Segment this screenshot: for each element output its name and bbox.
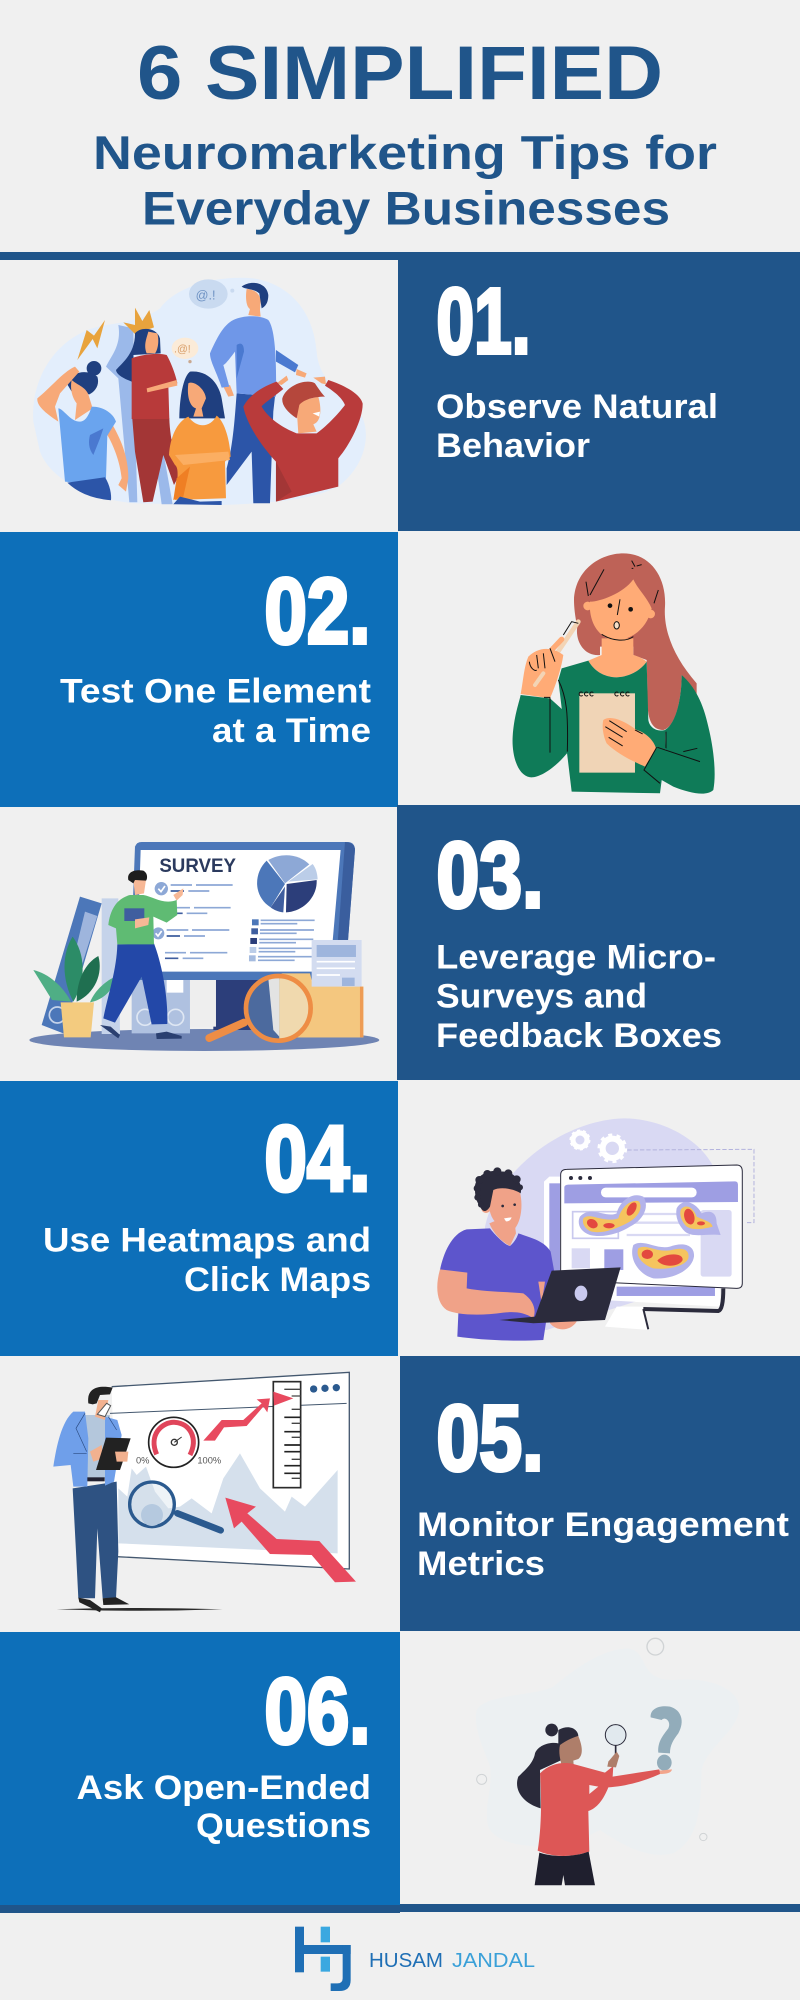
panel: tip 06: Questions	[196, 1807, 371, 1845]
illustration: frustrated group of people	[33, 278, 366, 505]
illustration: woman with magnifier and question mark	[476, 1638, 739, 1885]
panel: tip 04: Click Maps	[184, 1261, 371, 1299]
panel: tip 01: 01.	[436, 269, 530, 373]
logo: Husam Jandal: HUSAM	[369, 1950, 443, 1972]
panel: tip 05: Metrics	[417, 1545, 545, 1583]
panel: tip 01: Observe Natural	[436, 388, 718, 426]
icon: HJ monogram	[295, 1927, 351, 1991]
panel: tip 05: 05.	[436, 1386, 544, 1490]
panel: tip 03: Leverage Micro-	[436, 939, 716, 977]
panel: tip 05: Monitor Engagement	[417, 1506, 789, 1544]
panel: tip 06	[0, 1632, 400, 1905]
illustration: survey on monitor: SURVEY	[159, 856, 236, 877]
title: 6 SIMPLIFIED	[137, 31, 663, 116]
panel: tip 03	[397, 805, 800, 1080]
title: Neuromarketing Tips for	[93, 126, 717, 179]
illustration: man reviewing engagement dashboard: 100%	[197, 1455, 221, 1465]
panel: tip 02	[0, 532, 398, 807]
panel: tip 02: 02.	[264, 559, 370, 663]
panel: tip 05	[400, 1356, 800, 1631]
logo: Husam Jandal	[295, 1927, 535, 1991]
illustration: frustrated group of people: @.!	[196, 288, 216, 302]
panel: tip 03: 03.	[436, 823, 544, 927]
panel: tip 01: Behavior	[436, 427, 590, 465]
illustration: man viewing heatmap on screen	[437, 1118, 754, 1341]
panel: tip 03: Feedback Boxes	[436, 1017, 722, 1055]
illustration: man reviewing engagement dashboard	[53, 1372, 356, 1612]
title	[93, 31, 717, 234]
panel: tip 04: 04.	[264, 1106, 370, 1210]
panel: tip 06: 06.	[264, 1659, 370, 1763]
illustration: man reviewing engagement dashboard: 0%	[136, 1455, 149, 1465]
illustration: frustrated group of people: .@!	[174, 344, 191, 356]
panel: tip 01	[398, 252, 800, 531]
panel: tip 03: Surveys and	[436, 978, 647, 1016]
illustration: woman with pen and notepad	[513, 553, 715, 794]
panel: tip 04	[0, 1081, 398, 1356]
panel: tip 06: Ask Open-Ended	[76, 1769, 371, 1807]
panel: tip 02: at a Time	[212, 712, 371, 750]
panel: tip 02: Test One Element	[60, 672, 371, 710]
panel: tip 04: Use Heatmaps and	[43, 1221, 371, 1259]
illustration: survey on monitor	[29, 842, 379, 1051]
logo: Husam Jandal: JANDAL	[452, 1950, 535, 1972]
title: Everyday Businesses	[142, 182, 670, 234]
